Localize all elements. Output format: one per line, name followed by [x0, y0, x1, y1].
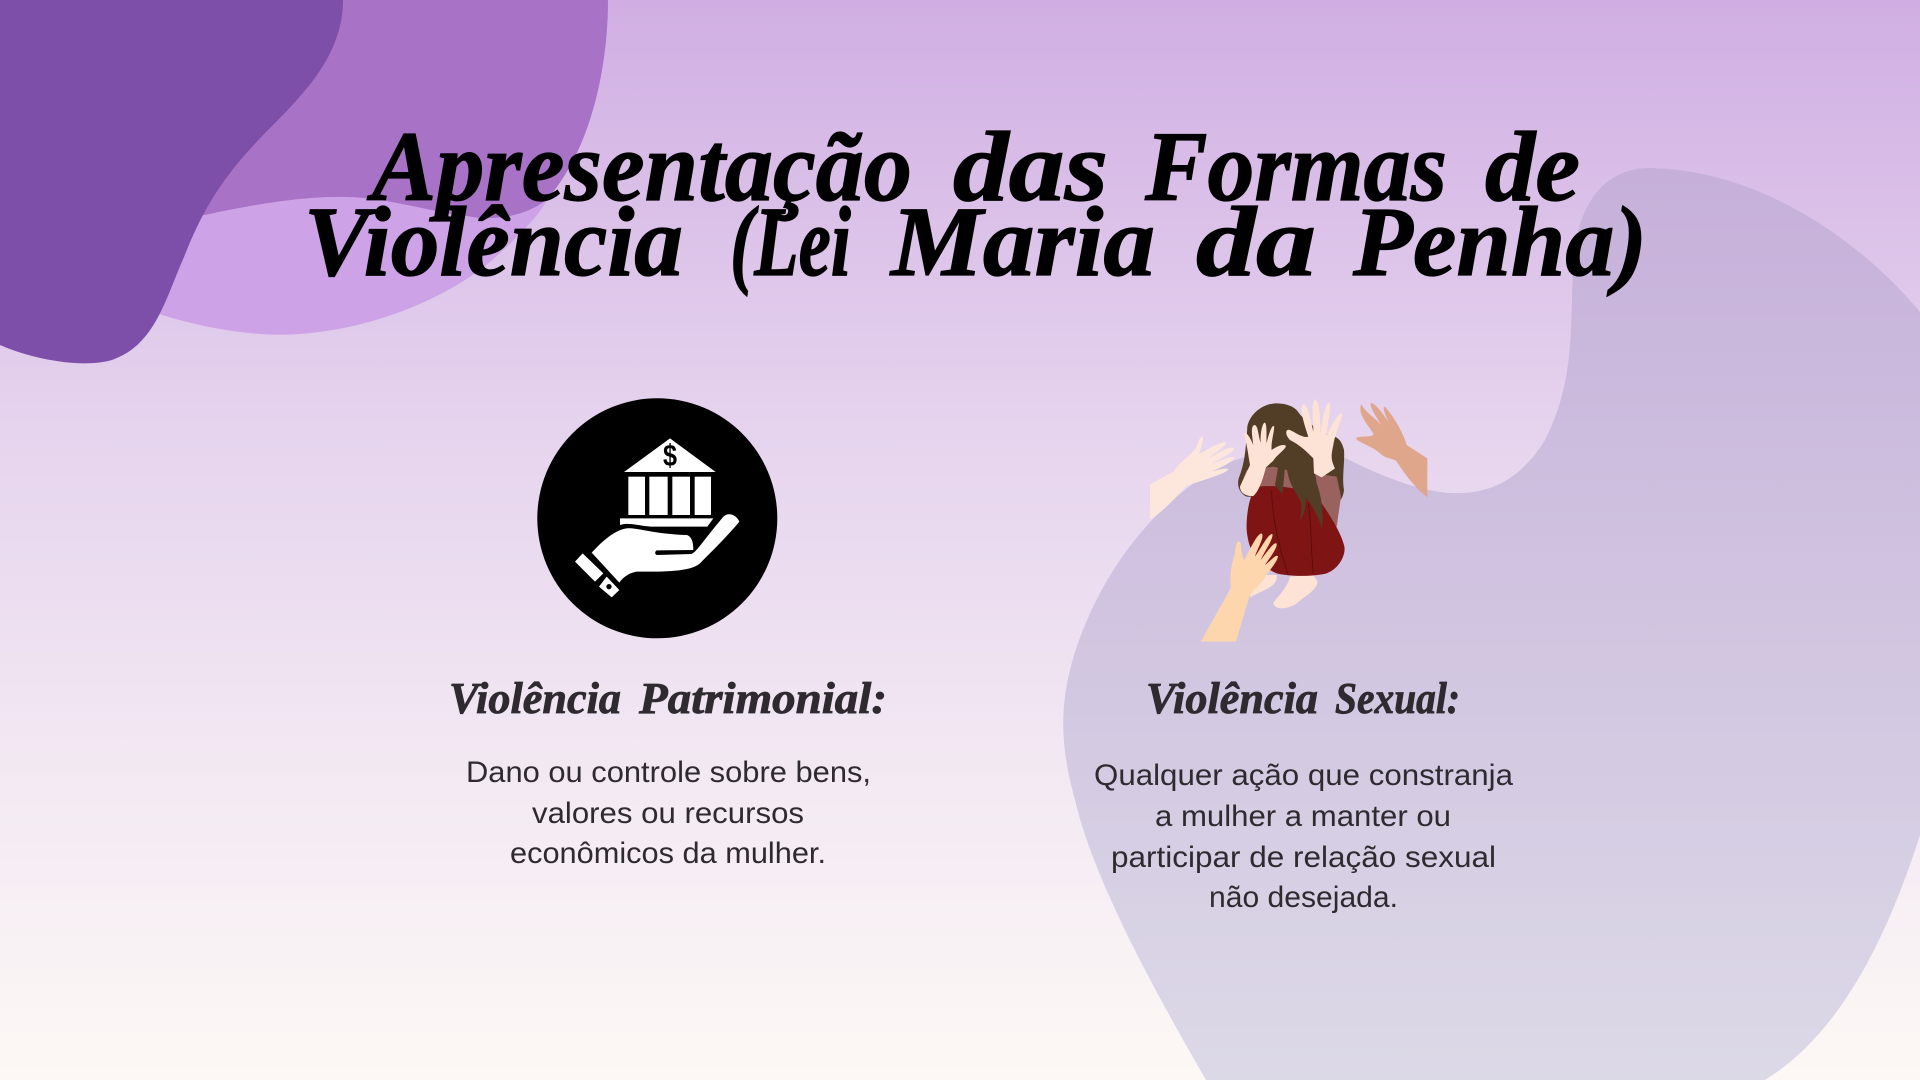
text block: sexual [1094, 759, 1513, 914]
hair strands [1275, 457, 1323, 528]
text block: patrimonial: Dano ou controle sobre bens, [466, 756, 871, 789]
heading: patrimonial [449, 674, 887, 723]
text block: sexual: a mulher a manter ou [1155, 800, 1451, 833]
title: (Lei [730, 186, 851, 297]
heading: sexual [1146, 674, 1460, 723]
shirt [1240, 467, 1341, 527]
dress folds [1272, 490, 1313, 575]
heading: patrimonial: Patrimonial: [638, 674, 887, 723]
heading: patrimonial: Violência [449, 674, 621, 723]
reaching hand: right [1356, 403, 1427, 497]
hair back [1238, 403, 1344, 501]
reaching hand: left [1150, 436, 1234, 519]
text block: sexual: participar de relação sexual [1111, 841, 1496, 874]
blob: light purple corner shape [100, 100, 548, 335]
text block: patrimonial: valores ou recursos [532, 797, 804, 830]
left arm and hand of girl [1240, 423, 1286, 496]
icon: bank on hand [537, 398, 777, 638]
title: das [953, 111, 1108, 222]
heading: sexual: Sexual: [1335, 674, 1460, 723]
text block: patrimonial [466, 756, 871, 870]
blob: right lilac shape [1063, 168, 1920, 1080]
heading: sexual: Violência [1146, 674, 1318, 723]
feet [1250, 575, 1318, 608]
title: Penha) [1352, 186, 1647, 297]
icon: bank on hand: $ [663, 438, 677, 472]
text block: patrimonial: econômicos da mulher. [510, 837, 826, 870]
title [304, 111, 1647, 297]
title: Maria [889, 186, 1155, 297]
text block: sexual: Qualquer ação que constranja [1094, 759, 1513, 792]
title: Formas [1144, 111, 1447, 222]
blob: medium purple corner shape [150, 0, 608, 218]
title: de [1485, 111, 1580, 222]
reaching hand: bottom [1201, 533, 1278, 642]
title: Violência [304, 186, 683, 297]
title: Apresentação [366, 111, 912, 222]
icon: girl surrounded by hands [1150, 399, 1427, 642]
title: da [1196, 186, 1316, 297]
right arm and hand of girl [1286, 399, 1342, 477]
text block: sexual: não desejada. [1209, 881, 1398, 914]
blob: dark purple corner shape [0, 0, 343, 363]
dress [1247, 486, 1345, 576]
